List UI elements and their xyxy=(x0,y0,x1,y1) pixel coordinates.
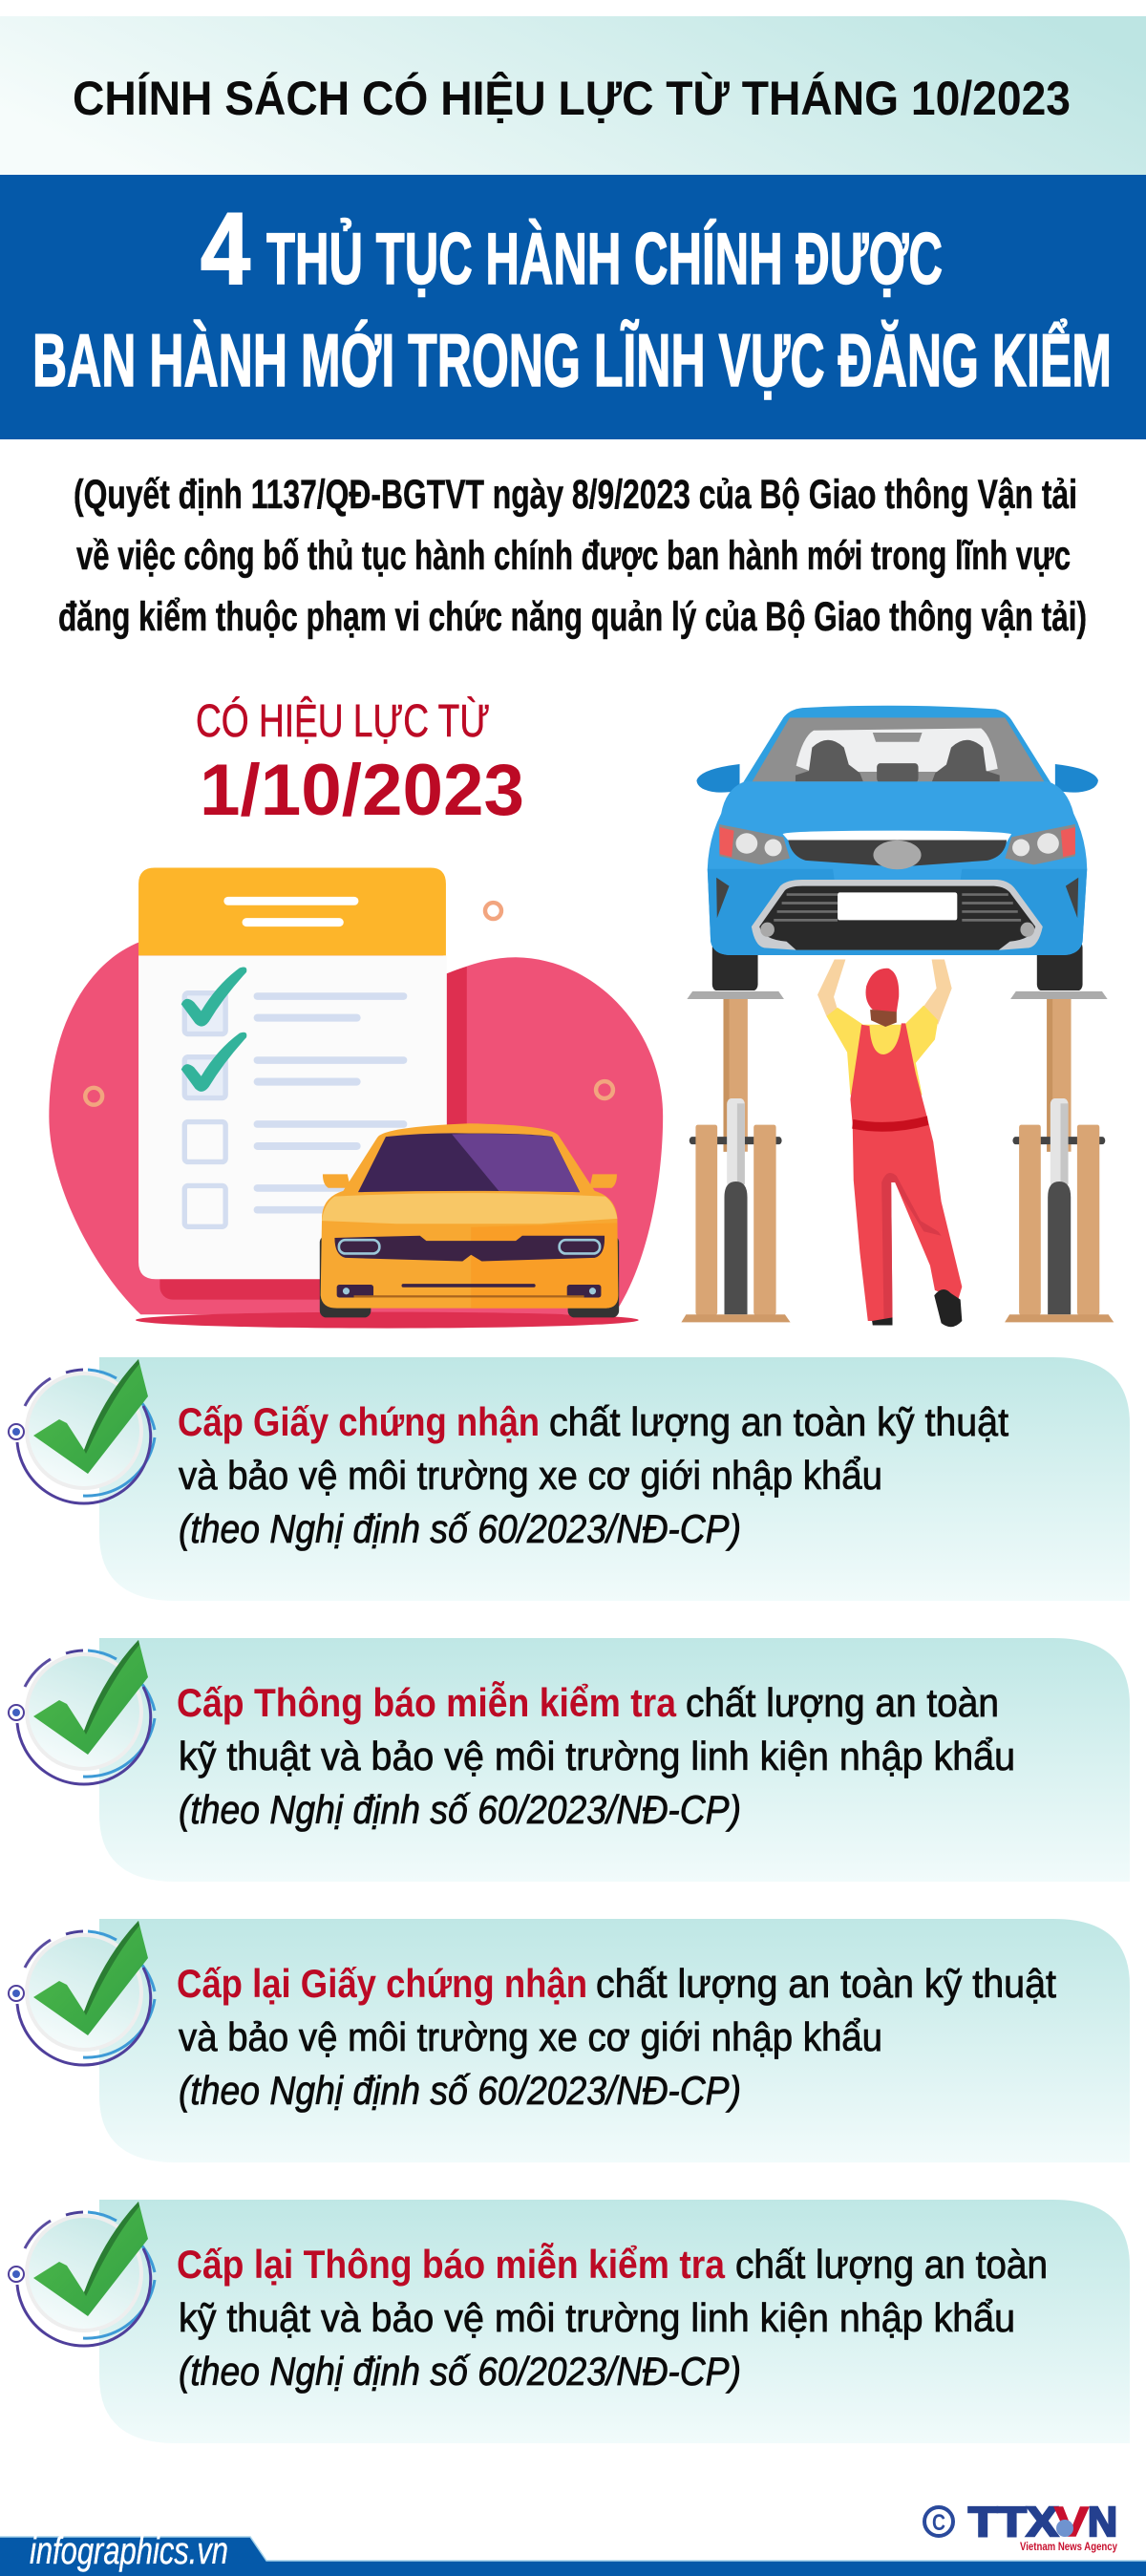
logo: TTXVN copyright: C xyxy=(932,2510,945,2536)
panel 2: inspection exemption notice for components xyxy=(9,1638,1130,1882)
pink blob xyxy=(49,942,663,1314)
decorative rings xyxy=(85,903,613,1105)
procedure text: Cấp Giấy chứng nhận xyxy=(178,1399,540,1444)
procedure text: (theo Nghị định số 60/2023/NĐ-CP) xyxy=(179,2068,741,2113)
logo: TTXVN copyright xyxy=(924,2499,1117,2553)
icon: check mark xyxy=(9,1921,155,2065)
yellow car xyxy=(320,1123,619,1317)
effective date xyxy=(196,695,524,831)
left lift xyxy=(681,991,791,1322)
procedure text: chất lượng an toàn kỹ thuật xyxy=(596,1961,1056,2006)
header band xyxy=(0,16,1146,175)
icon: check mark xyxy=(9,1359,155,1503)
illustration: checklist and yellow car xyxy=(49,867,663,1329)
right lift xyxy=(1005,991,1114,1322)
panel 1: new import vehicle certificate xyxy=(9,1357,1130,1601)
procedure text xyxy=(178,1399,1008,1551)
procedure text xyxy=(177,1961,1056,2113)
procedure text: và bảo vệ môi trường xe cơ giới nhập khẩu xyxy=(179,1453,882,1498)
panel 4: re-issue of exemption notice xyxy=(9,2200,1130,2443)
procedure text: Cấp Thông báo miễn kiểm tra xyxy=(177,1679,677,1725)
title banner xyxy=(0,175,1146,439)
illustration: blue car on lift with mechanic xyxy=(681,706,1114,1327)
procedure text: (theo Nghị định số 60/2023/NĐ-CP) xyxy=(179,2349,741,2394)
procedure text: Cấp lại Thông báo miễn kiểm tra xyxy=(177,2241,726,2287)
effective date: CÓ HIỆU LỰC TỪ xyxy=(196,695,490,747)
logo: TTXVN copyright: Vietnam News Agency xyxy=(1020,2540,1117,2553)
title number: 4 xyxy=(201,191,250,306)
footer bar xyxy=(0,2530,1146,2576)
icon: check mark xyxy=(9,1640,155,1784)
procedure text: kỹ thuật và bảo vệ môi trường linh kiện nhập khẩu xyxy=(179,1734,1015,1778)
procedure text: chất lượng an toàn xyxy=(686,1680,999,1725)
procedure text xyxy=(177,2241,1048,2394)
effective date: 1/10/2023 xyxy=(200,750,524,831)
procedure text: chất lượng an toàn xyxy=(735,2242,1048,2287)
icon: check mark xyxy=(9,2202,155,2346)
logo: TTXVN copyright: TTX xyxy=(968,2499,1058,2545)
logo: TTXVN copyright: V xyxy=(1054,2499,1090,2545)
footer site name: infographics.vn xyxy=(30,2530,228,2572)
blue car xyxy=(696,706,1098,990)
heading: policy month: CHÍNH SÁCH CÓ HIỆU LỰC TỪ THÁNG 10/2023 xyxy=(73,72,1071,125)
procedure text: (theo Nghị định số 60/2023/NĐ-CP) xyxy=(179,1506,741,1551)
checklist paper xyxy=(138,867,447,1279)
procedure text: chất lượng an toàn kỹ thuật xyxy=(549,1399,1008,1444)
procedure text xyxy=(177,1679,1015,1832)
procedure text: kỹ thuật và bảo vệ môi trường linh kiện nhập khẩu xyxy=(179,2295,1015,2340)
panel 3: re-issue of vehicle certificate xyxy=(9,1919,1130,2162)
logo: TTXVN copyright: N xyxy=(1088,2499,1117,2545)
procedure text: (theo Nghị định số 60/2023/NĐ-CP) xyxy=(179,1787,741,1832)
mechanic xyxy=(817,959,962,1327)
procedure text: và bảo vệ môi trường xe cơ giới nhập khẩu xyxy=(179,2014,882,2059)
procedure text: Cấp lại Giấy chứng nhận xyxy=(177,1961,587,2006)
decision description xyxy=(58,472,1087,640)
